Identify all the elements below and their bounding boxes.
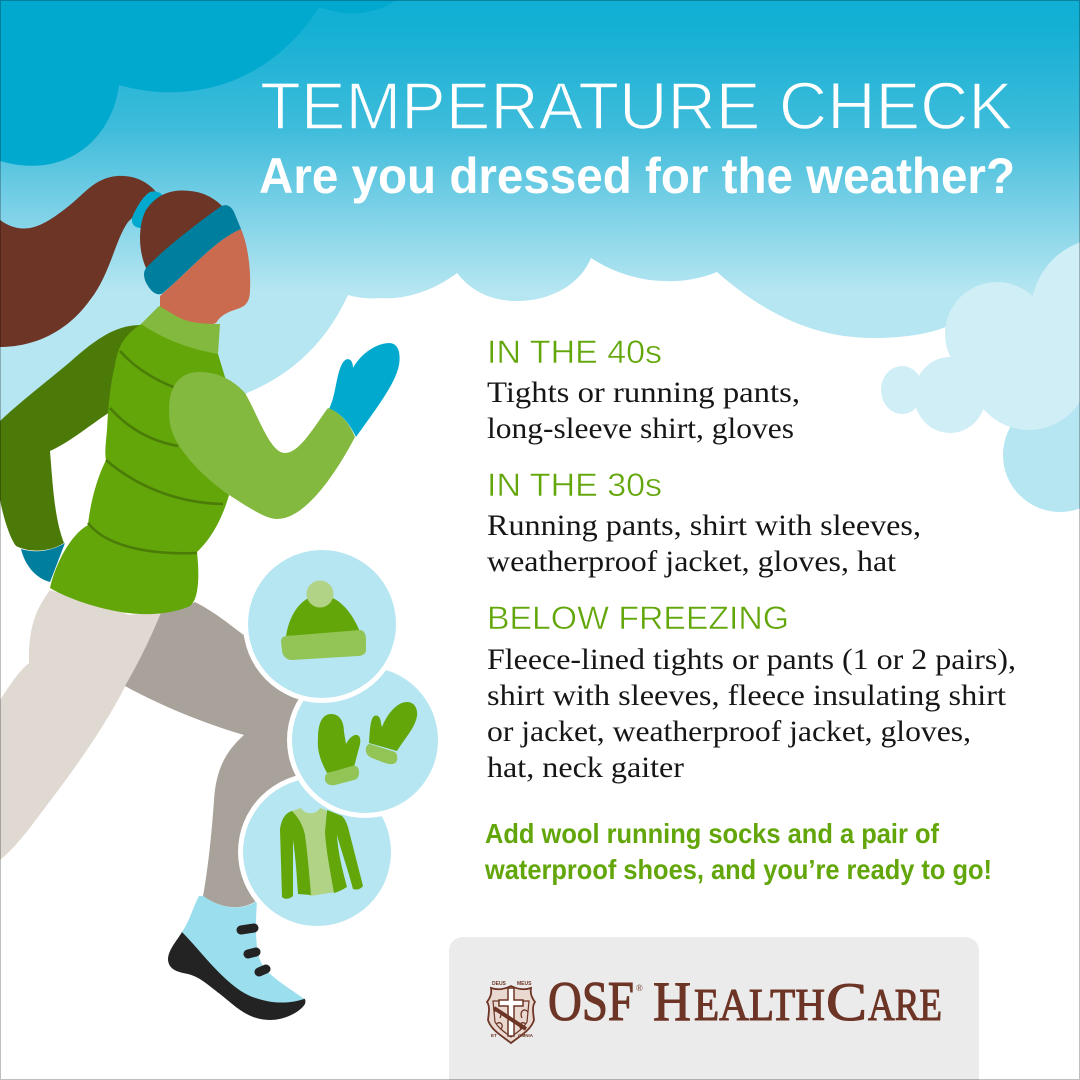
logo: crest: MEUS [517, 981, 532, 987]
logo: wordmark: OSF [548, 971, 634, 1033]
jacket quilting lines [88, 351, 223, 553]
back arm [0, 325, 141, 551]
text block: 30s clothing: weatherproof jacket, gloves, hat [487, 546, 897, 578]
dark cloud top left [0, 0, 397, 166]
text block: 30s clothing [487, 510, 921, 578]
text block: below freezing clothing: hat, neck gaiter [487, 752, 684, 784]
headband [144, 205, 241, 294]
heading: in the 30s: IN THE 30s [487, 467, 662, 503]
logo: wordmark: ARE [868, 980, 942, 1030]
front leg [0, 590, 162, 860]
heading: below freezing: BELOW FREEZING [487, 600, 789, 636]
runner illustration [0, 176, 400, 1020]
section: in the 40s [487, 334, 800, 445]
logo panel [449, 937, 979, 1080]
logo: wordmark: ® [636, 983, 643, 993]
text block: 40s clothing [487, 377, 800, 445]
callout: socks and shoes: waterproof shoes, and you’re ready to go! [484, 854, 992, 885]
logo: crest: OMNIA [518, 1033, 534, 1038]
text block: 40s clothing: long-sleeve shirt, gloves [487, 413, 794, 445]
text block: 40s clothing: Tights or running pants, [487, 377, 800, 409]
icon: hat circle [243, 545, 401, 703]
subtitle: Are you dressed for the weather? [259, 148, 1015, 204]
section: in the 30s [487, 467, 921, 578]
raised glove [329, 343, 400, 437]
shoe laces [241, 928, 266, 972]
clouds right side [881, 238, 1080, 512]
sky background with cloud edge [0, 0, 1080, 440]
logo: wordmark: C [826, 972, 867, 1032]
logo: wordmark [548, 971, 942, 1033]
callout: socks and shoes [484, 818, 992, 885]
heading: in the 40s: IN THE 40s [487, 334, 662, 370]
back glove [21, 543, 65, 582]
logo: crest [487, 981, 535, 1043]
icon: jacket circle [238, 773, 396, 931]
text block: below freezing clothing: or jacket, weatherproof jacket, gloves, [487, 716, 971, 748]
text block: below freezing clothing [487, 644, 1016, 784]
text block: 30s clothing: Running pants, shirt with sleeves, [487, 510, 921, 542]
shoe upper [182, 896, 304, 1003]
logo: crest: ET [491, 1033, 497, 1038]
hair tie [132, 191, 165, 228]
hair on head [140, 190, 224, 275]
logo: wordmark: H [653, 971, 691, 1033]
text block: below freezing clothing: shirt with sleeves, fleece insulating shirt [487, 680, 1007, 712]
back leg [125, 602, 310, 907]
front arm [169, 372, 355, 519]
section: below freezing [487, 600, 1016, 784]
jacket body [50, 324, 232, 614]
shoe sole [168, 932, 305, 1020]
icon: mittens circle [287, 662, 443, 818]
text block: below freezing clothing: Fleece-lined tights or pants (1 or 2 pairs), [487, 644, 1016, 676]
hair ponytail [0, 176, 157, 347]
logo: crest: DEUS [492, 981, 507, 987]
callout: socks and shoes: Add wool running socks and a pair of [485, 818, 940, 849]
face [160, 229, 250, 328]
title: TEMPERATURE CHECK [260, 69, 1013, 144]
collar [141, 306, 220, 354]
logo: wordmark: EALTH [694, 980, 825, 1030]
